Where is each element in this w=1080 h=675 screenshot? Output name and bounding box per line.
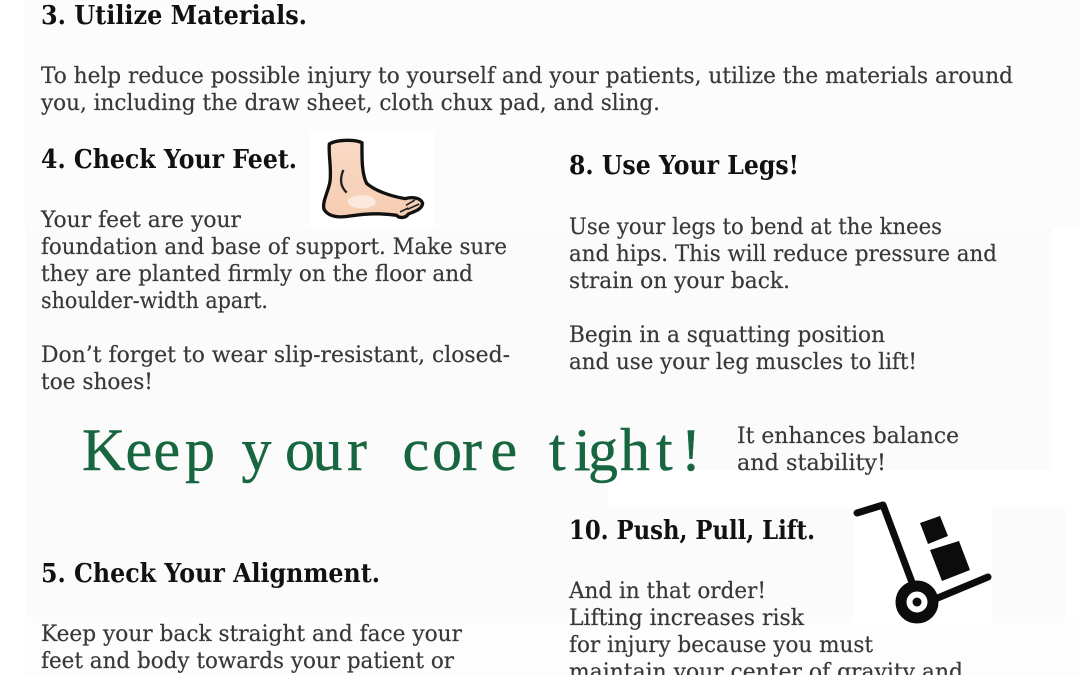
section 8: use your legs <box>569 151 997 375</box>
green slogan: core <box>402 417 517 483</box>
text block: feet advice: shoulder-width apart. <box>41 289 268 314</box>
text block: alignment advice <box>41 622 462 674</box>
text block: alignment advice: Keep your back straight and face your <box>41 622 462 647</box>
text block: feet advice: they are planted firmly on the floor and <box>41 262 473 287</box>
section 5: check your alignment <box>41 559 462 674</box>
text block: feet advice: foundation and base of support. Make sure <box>41 235 507 260</box>
section 3: utilize materials <box>40 1 1013 116</box>
text block: feet advice: Your feet are your <box>40 208 241 233</box>
text block: legs advice: strain on your back. <box>569 269 790 294</box>
text block: core benefit <box>737 424 959 476</box>
green slogan: tight! <box>549 417 701 483</box>
icon: foot <box>310 130 434 228</box>
icon: hand truck <box>854 505 992 630</box>
text block: materials advice: To help reduce possible injury to yourself and your patients, utilize the materials around <box>41 64 1013 89</box>
text block: materials advice <box>40 64 1013 116</box>
text block: alignment advice: feet and body towards your patient or <box>41 649 454 674</box>
section 4: check your feet <box>40 130 510 395</box>
text block: feet advice: Don’t forget to wear slip-resistant, closed- <box>41 343 510 368</box>
green slogan <box>82 417 701 483</box>
text block: legs advice: Use your legs to bend at the knees <box>569 215 942 240</box>
text block: legs advice: and hips. This will reduce pressure and <box>569 242 997 267</box>
text block: feet advice <box>40 208 510 395</box>
text block: push pull lift advice <box>568 579 963 675</box>
text block: legs advice: and use your leg muscles to lift! <box>569 350 917 375</box>
green slogan: Keep <box>82 417 215 483</box>
text block: core benefit: It enhances balance <box>737 424 959 449</box>
heading: 8. Use Your Legs: 8. Use Your Legs! <box>569 151 799 181</box>
heading: 3. Utilize Materials: 3. Utilize Materials. <box>41 1 307 31</box>
heading: 5. Check Your Alignment: 5. Check Your Alignment. <box>41 559 380 589</box>
green slogan: your <box>242 417 367 483</box>
text block: feet advice: toe shoes! <box>41 370 153 395</box>
heading: 4. Check Your Feet: 4. Check Your Feet. <box>41 145 297 175</box>
section 10: push pull lift <box>568 505 992 675</box>
text block: legs advice: Begin in a squatting position <box>569 323 885 348</box>
text block: legs advice <box>569 215 997 375</box>
text block: push pull lift advice: And in that order! <box>568 579 766 604</box>
text block: core benefit: and stability! <box>737 451 886 476</box>
text block: push pull lift advice: Lifting increases risk <box>569 606 805 631</box>
callout: keep your core tight <box>82 417 959 483</box>
text block: push pull lift advice: for injury because you must <box>569 633 873 658</box>
heading: 10. Push, Pull, Lift: 10. Push, Pull, Lift. <box>569 516 815 546</box>
text block: materials advice: you, including the draw sheet, cloth chux pad, and sling. <box>40 91 660 116</box>
